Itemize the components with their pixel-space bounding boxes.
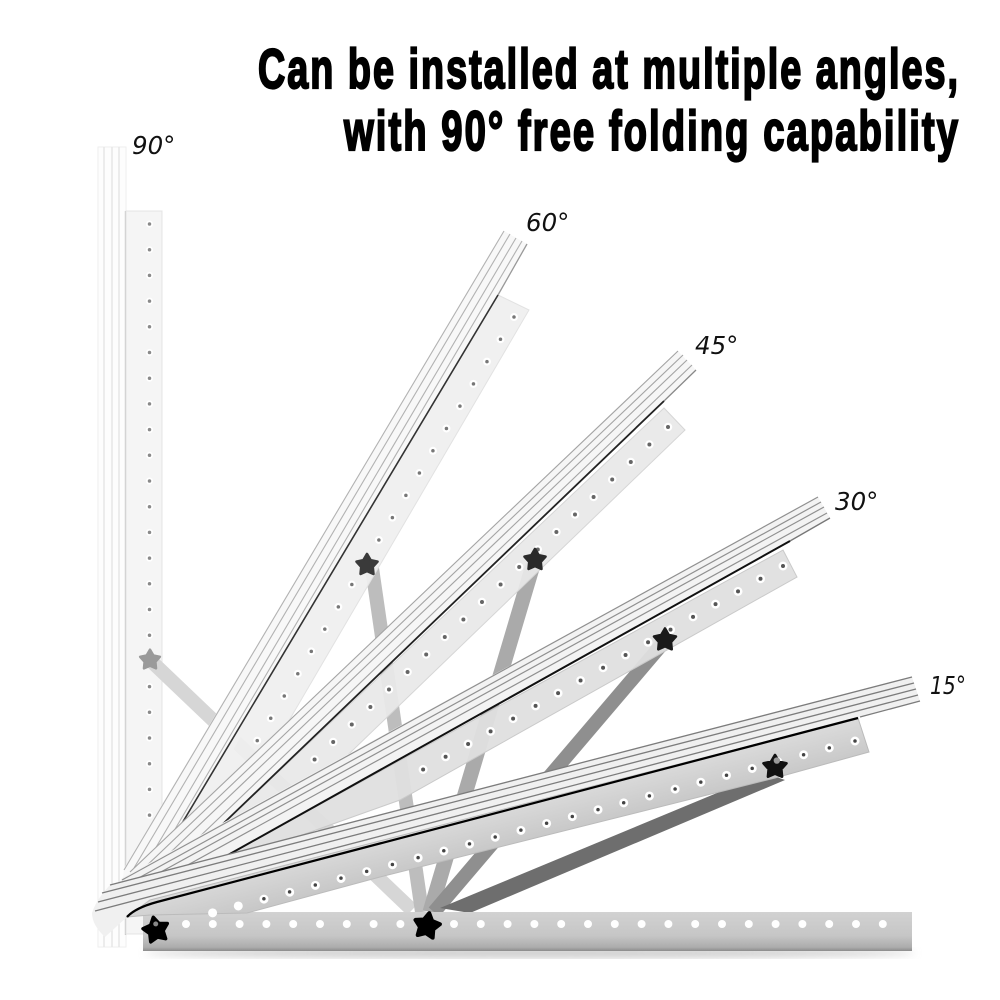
bracket at 60 degrees [122,231,529,890]
bracket at 15 degrees [92,677,920,937]
label 60 degrees: 60° [526,208,569,237]
central pivot knob [413,911,441,938]
knob on 60 degree bracket [356,554,378,574]
bracket at 90 degrees [98,147,162,947]
bracket at 30 degrees [112,497,830,895]
knob on 90 degree bracket [140,650,160,668]
base bar [143,912,912,951]
title [258,37,960,162]
knob on 15 degree bracket [764,755,786,777]
knob on 45 degree bracket [524,549,546,569]
bottom shadow [145,948,915,958]
label 30 degrees: 30° [835,487,878,516]
label 45 degrees: 45° [695,331,738,360]
left pivot knob [141,915,170,943]
bracket at 45 degrees [118,351,696,892]
knob on 30 degree bracket [654,629,676,649]
support struts [150,565,785,913]
label 15 degrees: 15° [930,671,966,700]
label 90 degrees: 90° [132,131,175,160]
